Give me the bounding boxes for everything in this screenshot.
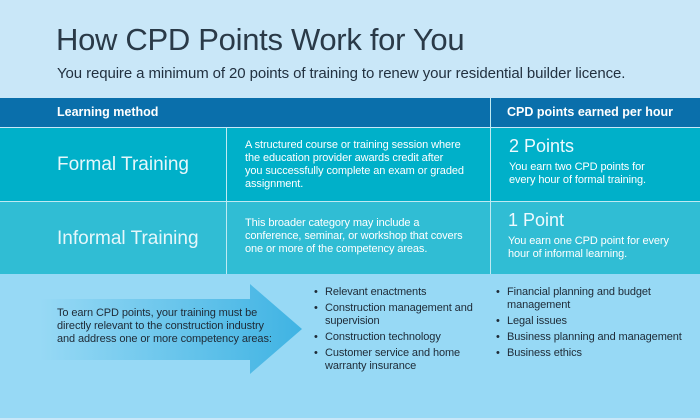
- formal description: the education provider awards credit after: [245, 152, 443, 164]
- informal label: Informal Training: [57, 228, 199, 249]
- competency list 2: management: [507, 299, 570, 311]
- competency list 1: Customer service and home: [325, 347, 460, 359]
- formal label: Formal Training: [57, 154, 189, 175]
- competency list 2: Business ethics: [507, 347, 582, 359]
- formal description: assignment.: [245, 178, 303, 190]
- row: formal training: [0, 128, 700, 201]
- competency list 1: [314, 286, 473, 372]
- formal points: [509, 136, 646, 186]
- competency list 2: [496, 286, 682, 359]
- arrow text: and address one or more competency areas:: [57, 333, 272, 345]
- competency list 1: Construction management and: [325, 302, 473, 314]
- arrow text: To earn CPD points, your training must be: [57, 307, 257, 319]
- competency list 2: Financial planning and budget: [507, 286, 651, 298]
- competency list 2: Business planning and management: [507, 331, 682, 343]
- arrow: [64, 284, 302, 374]
- formal description: [245, 139, 464, 190]
- informal description: conference, seminar, or workshop that covers: [245, 230, 463, 242]
- informal description: [245, 217, 463, 255]
- bottom panel: [0, 274, 700, 418]
- header bar: [0, 98, 700, 127]
- arrow text: [57, 307, 272, 345]
- formal points: 2 Points: [509, 136, 574, 156]
- informal description: one or more of the competency areas.: [245, 243, 427, 255]
- arrow text: directly relevant to the construction industry: [57, 320, 264, 332]
- subtitle: You require a minimum of 20 points of training to renew your residential builder licence.: [57, 65, 625, 82]
- formal description: you successfully complete an exam or graded: [245, 165, 464, 177]
- competency list 1: Relevant enactments: [325, 286, 426, 298]
- formal description: A structured course or training session where: [245, 139, 461, 151]
- title: How CPD Points Work for You: [56, 22, 464, 57]
- informal points: hour of informal learning.: [508, 248, 627, 260]
- informal points: [508, 210, 669, 260]
- competency list 1: supervision: [325, 315, 380, 327]
- row: informal training: [0, 202, 700, 274]
- informal points: You earn one CPD point for every: [508, 235, 669, 247]
- competency list 1: warranty insurance: [325, 360, 416, 372]
- competency list 1: Construction technology: [325, 331, 441, 343]
- header: points: CPD points earned per hour: [507, 105, 673, 119]
- informal points: 1 Point: [508, 210, 564, 230]
- formal points: every hour of formal training.: [509, 174, 646, 186]
- formal points: You earn two CPD points for: [509, 161, 645, 173]
- header: learning method: Learning method: [57, 105, 158, 119]
- competency list 2: Legal issues: [507, 315, 567, 327]
- informal description: This broader category may include a: [245, 217, 419, 229]
